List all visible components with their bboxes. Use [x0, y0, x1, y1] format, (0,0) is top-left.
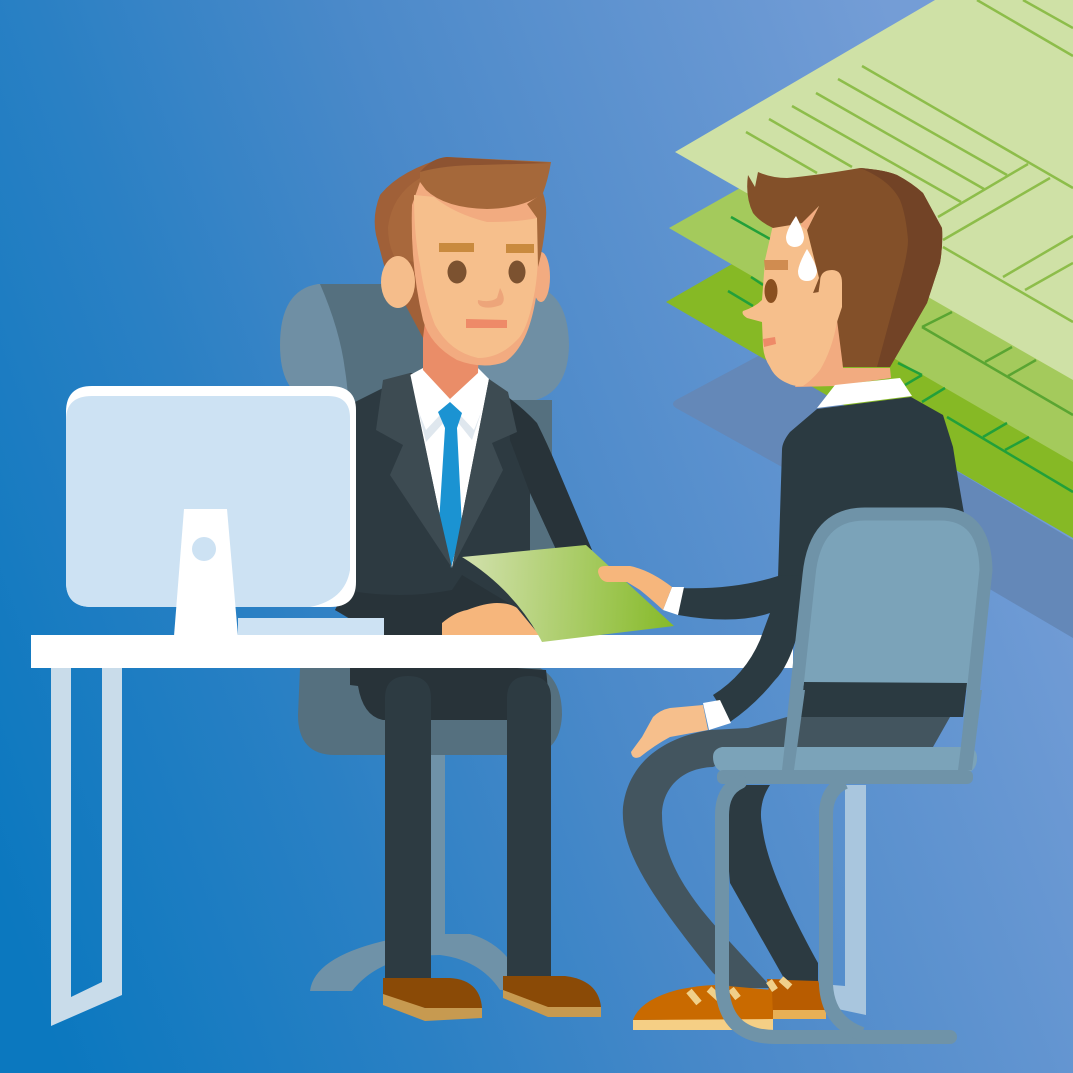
- left shoe: [383, 990, 482, 1021]
- sweat drop upper: [786, 216, 804, 247]
- jacket body: [335, 373, 535, 640]
- cuff upper: [663, 587, 684, 615]
- chair upright right: [958, 690, 982, 770]
- ear left: [381, 256, 415, 308]
- monitor logo: [192, 537, 216, 561]
- collar: [817, 378, 912, 408]
- shirt: [410, 368, 489, 568]
- top green sheet: [675, 0, 1073, 380]
- arm: [678, 575, 800, 722]
- stacked document sheets: [666, 0, 1073, 638]
- bottom green sheet: [666, 225, 1073, 538]
- desk: [31, 635, 866, 1026]
- forehead notch: [800, 206, 819, 230]
- chair back frame: [788, 514, 986, 770]
- chair front leg: [722, 782, 950, 1037]
- top sheet lines: [746, 0, 1073, 322]
- tie: [438, 402, 462, 568]
- forehead shade: [420, 182, 537, 222]
- folder: [462, 545, 674, 642]
- chair base and stem: [310, 750, 525, 991]
- hair front: [420, 157, 551, 209]
- chair back fill: [798, 514, 986, 690]
- chair band: [800, 682, 967, 717]
- keyboard: [238, 618, 384, 636]
- dark waist: [335, 575, 520, 636]
- face light: [414, 195, 538, 358]
- back hair: [375, 157, 447, 338]
- ear: [818, 270, 842, 322]
- right desk leg: [833, 785, 866, 1015]
- hair shadow: [860, 168, 942, 367]
- chair seat: [298, 668, 562, 755]
- lower sheet lines: [728, 217, 1073, 492]
- ear right: [532, 252, 550, 302]
- arm right: [508, 397, 592, 552]
- candidate chair: [713, 514, 986, 1037]
- far shoe sole: [773, 1010, 826, 1019]
- right shoe: [503, 988, 601, 1017]
- mouth: [763, 337, 776, 347]
- collar shade right: [456, 410, 482, 440]
- monitor stand: [174, 509, 238, 636]
- hair: [747, 168, 942, 367]
- neck: [423, 310, 480, 399]
- lapel right: [452, 379, 517, 568]
- shadow sheet: [673, 355, 1073, 638]
- face: [742, 225, 842, 386]
- far leg: [728, 785, 818, 981]
- collar shade left: [418, 410, 446, 442]
- brow: [764, 260, 788, 270]
- hand on knee: [631, 705, 708, 758]
- right sideburn: [527, 193, 546, 267]
- eyes: [448, 260, 466, 284]
- middle green sheet: [669, 160, 1073, 462]
- near shoe sole: [633, 1018, 773, 1030]
- left desk leg: [51, 668, 122, 1026]
- nose: [478, 288, 504, 308]
- torso: [778, 397, 972, 700]
- near shoe: [633, 985, 773, 1020]
- interviewer suit: [335, 368, 592, 640]
- candidate: [598, 168, 972, 1030]
- gap between arm and torso: [530, 493, 557, 552]
- brows: [439, 243, 474, 252]
- far shoe: [767, 979, 826, 1019]
- monitor: [66, 386, 384, 636]
- lapel left: [376, 373, 452, 568]
- chair rear leg: [826, 782, 862, 1034]
- seat bottom bar: [717, 770, 973, 784]
- eye: [764, 279, 778, 303]
- near leg: [623, 717, 950, 988]
- sweat drop lower: [798, 249, 817, 281]
- hand on desk: [442, 603, 540, 636]
- interviewer chair back: [280, 284, 569, 560]
- mouth: [466, 319, 507, 328]
- side hair: [388, 178, 420, 262]
- neck shade: [795, 300, 891, 387]
- seat top: [713, 747, 977, 772]
- shoe laces: [689, 979, 790, 1003]
- interviewer head: [375, 157, 551, 399]
- face: [412, 182, 538, 366]
- hand on folder: [598, 566, 672, 610]
- hair top edge: [420, 157, 551, 172]
- interviewer legs: [350, 668, 601, 1021]
- cuff lower: [703, 700, 731, 730]
- chair upright left: [782, 690, 805, 770]
